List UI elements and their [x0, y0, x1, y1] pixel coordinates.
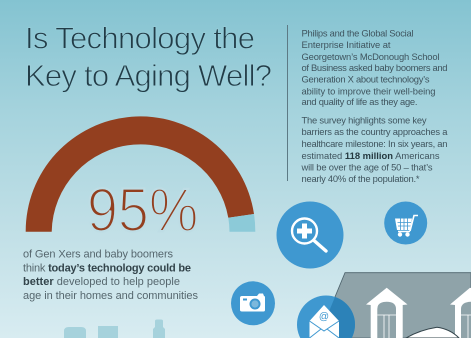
icon: camera [231, 281, 275, 325]
gauge: 95 percent arc [26, 116, 255, 232]
text block: statistic description: age in their homes and communities [23, 290, 198, 302]
text block: intro: ability to improve their well-being [302, 86, 436, 96]
text block: survey: healthcare milestone: In six years, an [302, 138, 448, 149]
text block: intro: Enterprise Initiative at [302, 39, 391, 50]
icon: email [297, 296, 355, 338]
text block: statistic description: better developed to help people [23, 276, 180, 288]
text block: survey: The survey highlights some key [302, 114, 427, 126]
skyline silhouettes [64, 320, 165, 338]
house [318, 273, 471, 338]
text block: survey: will be over the age of 50 – that’s [300, 162, 433, 172]
icon: cart [384, 202, 427, 244]
text block: statistic description [23, 249, 198, 302]
text block: intro: and quality of life as they age. [302, 96, 418, 107]
icon: magnifier [276, 202, 344, 268]
text block: survey: estimated 118 million Americans [302, 150, 440, 161]
dormer: left [366, 288, 408, 338]
text block: statistic description: of Gen Xers and baby boomers [23, 249, 174, 261]
foreground curve [406, 327, 459, 338]
text block: intro: Georgetown’s McDonough School [302, 51, 440, 62]
text block: intro: Philips and the Global Social [302, 28, 414, 39]
dormer: right [450, 288, 471, 338]
text block: survey: nearly 40% of the population.* [302, 173, 420, 184]
title [25, 20, 272, 93]
title: Is Technology the [25, 20, 255, 56]
title: Key to Aging Well? [25, 58, 272, 93]
text block: survey: barriers as the country approaches a [302, 126, 448, 137]
big number: 95%: 95% [87, 176, 198, 245]
icon: email: @ [319, 312, 329, 322]
text block: survey [300, 114, 448, 184]
text block: intro: of Business asked baby boomers and [302, 62, 448, 73]
text block: statistic description: think today’s technology could be [23, 262, 191, 274]
text block: intro [302, 28, 448, 107]
text block: intro: Generation X about technology’s [302, 74, 430, 85]
divider [287, 25, 288, 181]
